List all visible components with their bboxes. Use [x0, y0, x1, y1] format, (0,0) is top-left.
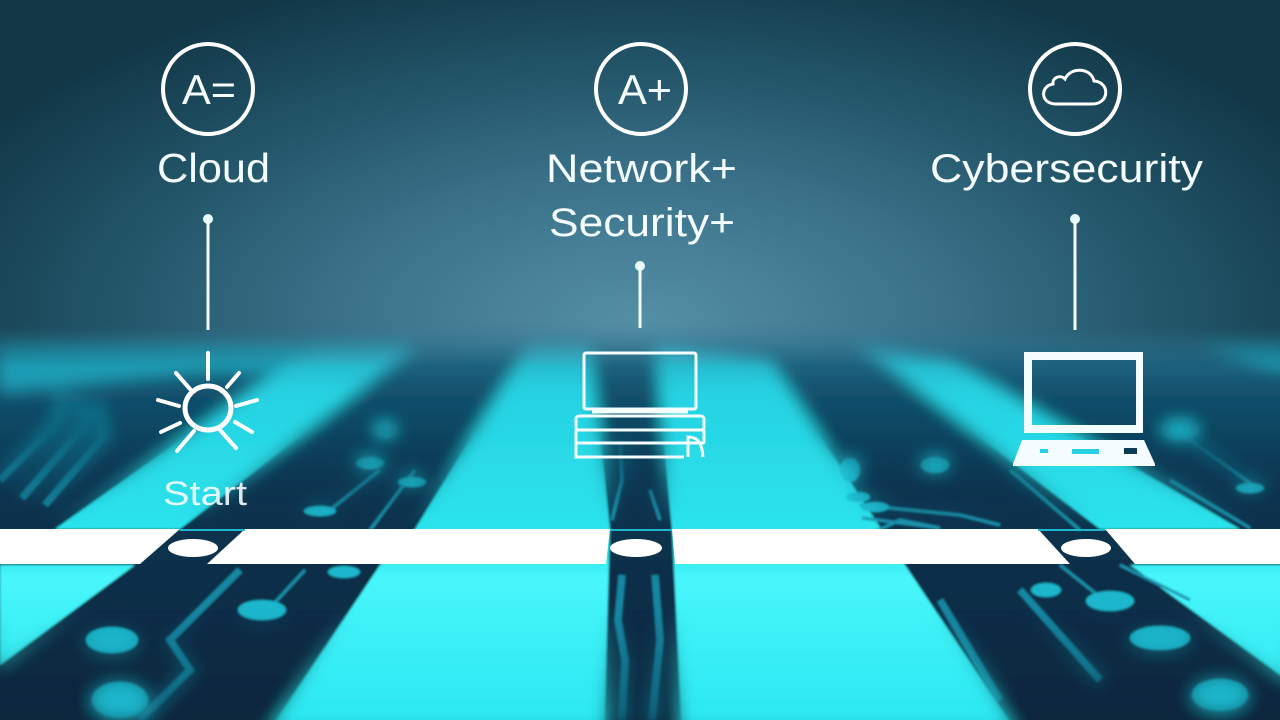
heading: Cybersecurity: Cybersecurity — [930, 147, 1203, 191]
column: cloud — [157, 44, 270, 330]
label: Start: Start — [163, 475, 248, 513]
connector: network — [635, 261, 645, 328]
circuit board perspective strips — [0, 330, 1280, 720]
heading: Security+: Security+ — [549, 201, 735, 245]
icon: sun start — [158, 353, 257, 451]
icon: A= badge: A= — [182, 66, 236, 113]
column: network and security — [546, 44, 737, 328]
timeline marker: start — [168, 539, 218, 557]
heading: Cloud: Cloud — [157, 145, 270, 191]
icon: cloud badge — [1030, 44, 1120, 134]
icon: A+ badge: A+ — [618, 66, 672, 113]
heading: Network+: Network+ — [546, 147, 737, 191]
icon: laptop — [1013, 352, 1155, 466]
icon: desktop computer — [576, 353, 704, 457]
icon: A= badge — [163, 44, 253, 134]
white timeline bar — [0, 529, 1280, 564]
icon: A+ badge — [596, 44, 686, 134]
connector: cloud — [203, 214, 213, 330]
column: cybersecurity — [930, 44, 1203, 330]
connector: cybersecurity — [1070, 214, 1080, 330]
